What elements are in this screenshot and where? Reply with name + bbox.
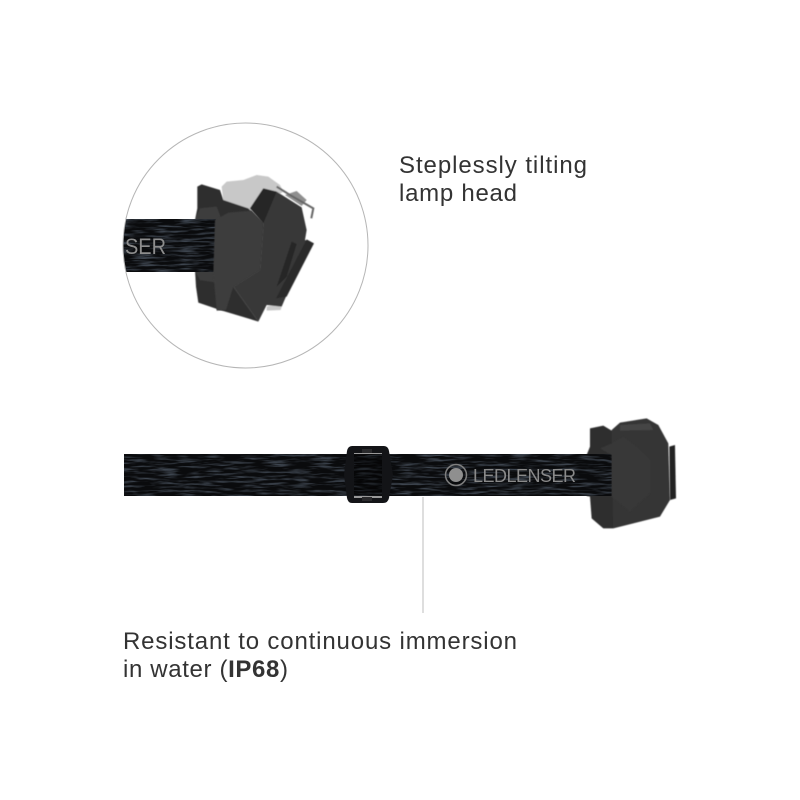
brand logo on strap: LEDLENSER xyxy=(473,466,576,486)
label: tilting lamp head: Steplessly tilting xyxy=(399,152,587,179)
strap segment in detail xyxy=(120,219,216,272)
label: water resistance: in water (IP68) xyxy=(123,656,288,683)
leader line xyxy=(422,497,424,613)
strap lettering: SER xyxy=(125,234,166,259)
label: tilting lamp head: lamp head xyxy=(399,180,517,207)
rear bracket xyxy=(195,184,263,322)
headband strap xyxy=(124,454,612,496)
lamp head rear layers xyxy=(587,418,670,528)
main body xyxy=(233,188,313,322)
strap blobs xyxy=(195,207,222,220)
label: tilting lamp head xyxy=(399,152,587,207)
lamp head front xyxy=(600,437,676,512)
lamp head rear layers xyxy=(195,175,314,322)
full headlamp side view xyxy=(124,418,676,528)
side arm over strap xyxy=(213,211,263,311)
detail circle: tilting lamp head xyxy=(120,123,368,368)
strap buckle xyxy=(344,446,393,503)
top edge highlight xyxy=(277,187,313,218)
label: water resistance xyxy=(123,628,517,683)
front lens strip xyxy=(276,239,314,298)
circle outline xyxy=(123,123,368,368)
tilted ghost of head xyxy=(222,175,283,212)
infographic canvas xyxy=(122,122,677,682)
label: water resistance: Resistant to continuous immersion xyxy=(123,628,517,655)
